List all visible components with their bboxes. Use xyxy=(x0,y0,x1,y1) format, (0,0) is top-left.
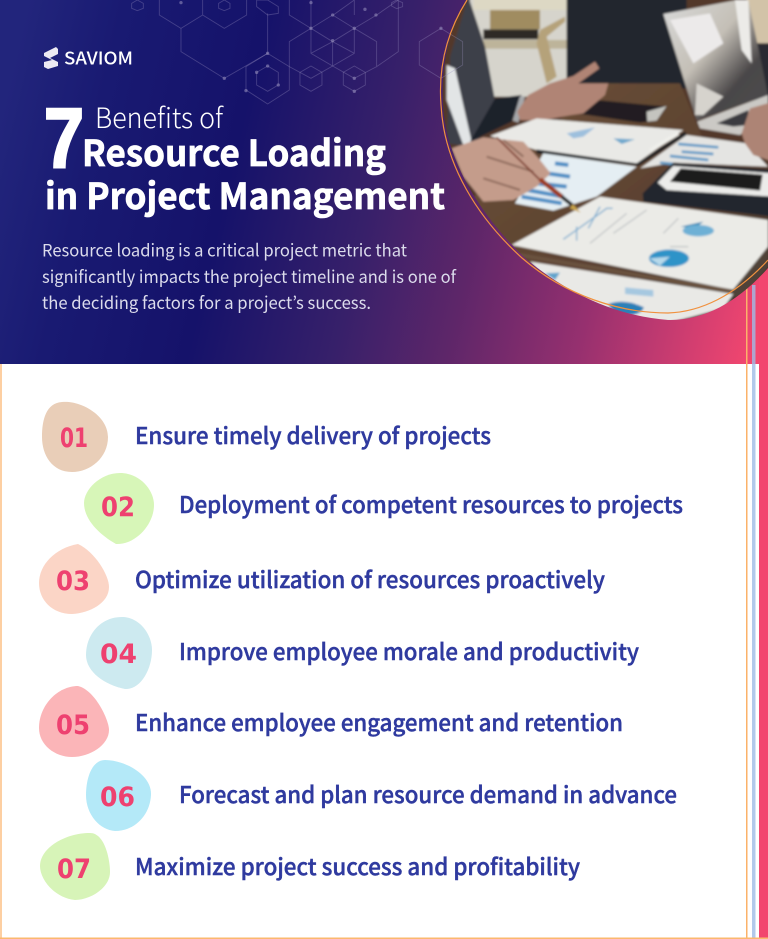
brown table strip xyxy=(520,255,735,292)
title: Benefits of xyxy=(95,97,225,137)
notebook xyxy=(577,100,667,123)
number blob 04 xyxy=(86,617,152,689)
benefit 02: Deployment of competent resources to projects xyxy=(179,486,683,520)
pen xyxy=(497,137,540,180)
hexagon network pattern xyxy=(132,0,463,104)
benefit 05 xyxy=(39,686,623,757)
left page border xyxy=(0,364,2,939)
blue vertical accent line xyxy=(752,285,756,939)
intro paragraph: Resource loading is a critical project metric that xyxy=(42,236,408,262)
intro paragraph: significantly impacts the project timeline and is one of xyxy=(42,263,457,288)
icon: S mark xyxy=(44,47,58,69)
number blob 03 xyxy=(39,544,109,614)
paper 1 xyxy=(490,118,683,163)
tablet folder xyxy=(643,163,768,217)
benefit 06 xyxy=(86,760,677,831)
benefit 05: 05 xyxy=(56,710,90,741)
tablet xyxy=(658,166,768,197)
benefit 04: 04 xyxy=(100,639,137,670)
number blob 05 xyxy=(39,686,109,757)
benefit 01 xyxy=(42,402,491,472)
laptop screen xyxy=(663,0,768,121)
logo: Saviom: SAVIOM xyxy=(64,46,133,70)
bottom page border xyxy=(0,938,768,939)
orange vertical accent line xyxy=(746,285,748,939)
benefit 07: 07 xyxy=(57,854,91,885)
title: Resource Loading xyxy=(82,125,386,177)
photo backdrop xyxy=(442,0,768,197)
laptop base xyxy=(697,95,768,135)
right hand xyxy=(742,102,768,162)
benefit 01: Ensure timely delivery of projects xyxy=(135,417,491,451)
suit xyxy=(446,0,496,146)
benefit 02 xyxy=(84,473,683,544)
number blob 01 xyxy=(42,402,108,472)
title: 7 xyxy=(44,91,84,185)
paper 2 xyxy=(640,135,768,168)
photo: business team reviewing charts xyxy=(437,0,768,323)
benefit 06: 06 xyxy=(100,782,135,813)
benefit 03: 03 xyxy=(56,566,90,597)
title: in Project Management xyxy=(45,168,445,220)
right pink strip xyxy=(759,270,768,939)
upper hand xyxy=(517,62,608,121)
header background xyxy=(0,0,768,364)
panel: white content area xyxy=(0,364,759,939)
benefit 05: Enhance employee engagement and retention xyxy=(135,704,623,738)
big paper xyxy=(512,197,768,291)
paper 3 with bar chart xyxy=(515,153,637,211)
photo outline arc xyxy=(440,0,768,313)
benefit 07 xyxy=(40,833,580,900)
number blob 07 xyxy=(40,833,110,900)
title xyxy=(44,91,445,220)
benefit 01: 01 xyxy=(60,423,88,454)
benefit 07: Maximize project success and profitability xyxy=(135,848,580,882)
wooden table xyxy=(474,82,734,300)
intro paragraph xyxy=(42,236,457,314)
benefit 03: Optimize utilization of resources proactively xyxy=(135,561,605,595)
lower hand xyxy=(452,137,551,202)
bottom paper xyxy=(530,262,733,322)
benefit 04: Improve employee morale and productivity xyxy=(179,633,639,667)
number blob 02 xyxy=(84,473,154,544)
pie charts xyxy=(681,222,703,228)
benefit 02: 02 xyxy=(101,492,135,523)
number blob 06 xyxy=(86,760,151,831)
intro paragraph: the deciding factors for a project’s success. xyxy=(42,289,371,314)
benefit 04 xyxy=(86,617,639,689)
benefit 06: Forecast and plan resource demand in advance xyxy=(179,776,677,810)
benefit 03 xyxy=(39,544,605,614)
